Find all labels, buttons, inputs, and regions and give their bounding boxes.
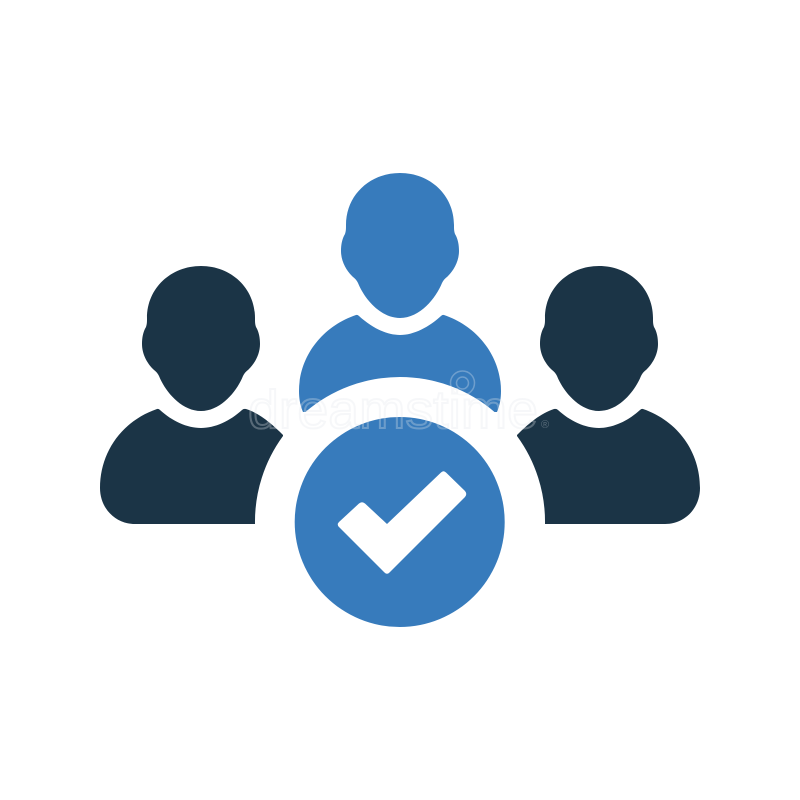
icon: check mark bbox=[338, 471, 466, 574]
icon: left person bbox=[100, 266, 283, 524]
icon: center person bbox=[299, 173, 501, 412]
icon: right person bbox=[517, 266, 700, 524]
icon: check badge bbox=[295, 417, 505, 627]
watermark: dreamstime bbox=[248, 380, 538, 440]
watermark: ® bbox=[541, 419, 549, 431]
